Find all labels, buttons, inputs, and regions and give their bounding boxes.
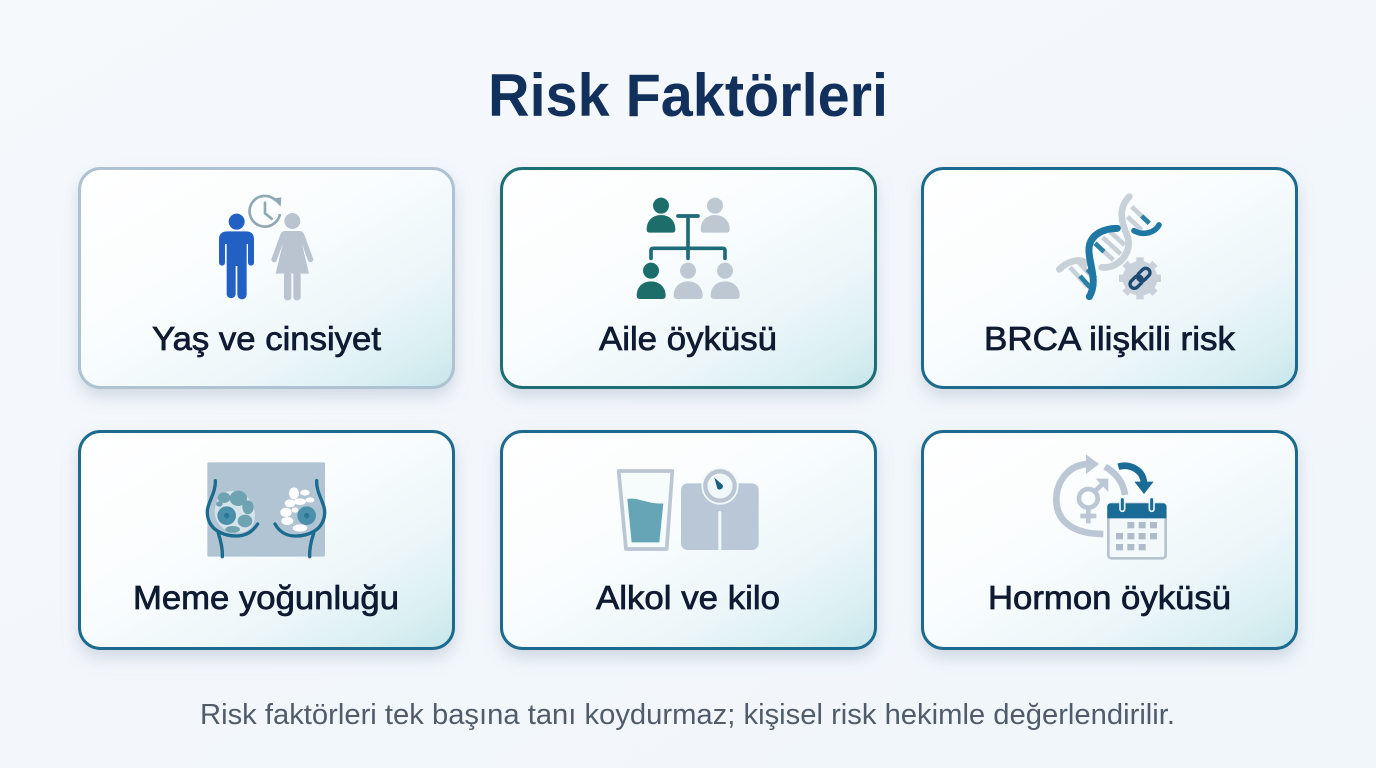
icon: hormone cycle and calendar xyxy=(1056,454,1166,558)
label: BRCA ilişkili risk xyxy=(984,320,1236,357)
footer note: Risk faktörleri tek başına tanı koydurmaz; kişisel risk hekimle değerlendirilir. xyxy=(200,699,1175,731)
icon: glass and weighing scale xyxy=(619,467,759,550)
panel: Aile öyküsü xyxy=(502,168,876,388)
panel: Yaş ve cinsiyet xyxy=(80,168,454,388)
label: Aile öyküsü xyxy=(599,320,777,357)
panel: Hormon öyküsü xyxy=(922,432,1296,648)
panel: BRCA ilişkili risk xyxy=(922,168,1296,388)
label: Hormon öyküsü xyxy=(988,579,1231,616)
icon: family tree xyxy=(637,198,740,299)
panel: Meme yoğunluğu xyxy=(80,432,454,648)
panel: Alkol ve kilo xyxy=(502,432,876,648)
label: Alkol ve kilo xyxy=(596,579,780,616)
icon: breast density illustration xyxy=(207,462,325,557)
icon: man, woman and clock xyxy=(219,196,313,300)
icon: DNA helix with gear and link xyxy=(1059,197,1161,299)
title: Risk Faktörleri xyxy=(488,62,888,129)
label: Meme yoğunluğu xyxy=(133,579,399,616)
label: Yaş ve cinsiyet xyxy=(152,320,381,357)
